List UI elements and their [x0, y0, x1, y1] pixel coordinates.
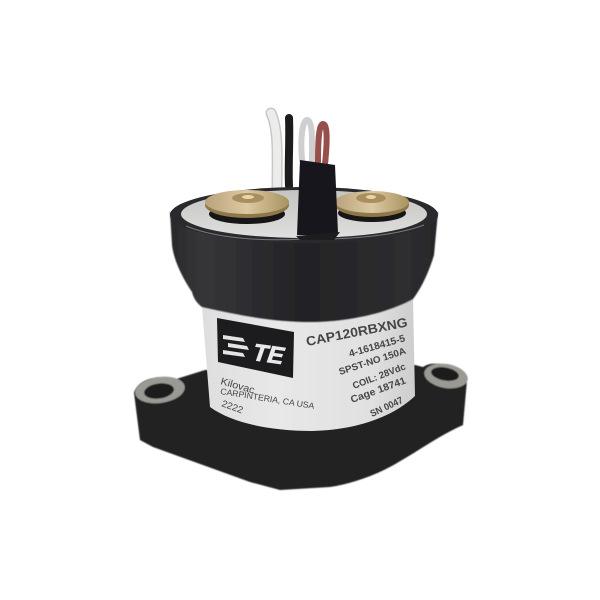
- insulating top surface: [181, 190, 427, 238]
- terminal: right brass post: [335, 191, 409, 222]
- label text: part numbers: COIL: 28Vdc: [351, 361, 407, 392]
- label text: part numbers: CARPINTERIA, CA USA: [220, 386, 315, 411]
- logo stripes: [223, 335, 249, 357]
- label text: part numbers: Kilovac: [219, 376, 256, 397]
- terminal: left brass post: [205, 190, 289, 224]
- label text: part numbers: Cage 18741: [349, 375, 408, 406]
- mounting flange: [133, 360, 470, 490]
- mounting hole: right: [422, 360, 470, 392]
- connector base: [296, 232, 340, 240]
- wire: black: [285, 118, 293, 186]
- product label: [202, 299, 415, 431]
- black cap: [170, 212, 438, 322]
- lead wires: [271, 113, 327, 190]
- rim lower edge highlight: [186, 225, 424, 240]
- label text: part numbers: 2222: [220, 398, 244, 416]
- label text: part numbers: 4-1618415-5: [348, 333, 407, 360]
- label text: part numbers: SPST-NO 150A: [338, 346, 408, 378]
- TE logo: TE: [251, 339, 287, 370]
- TE logo: [217, 318, 294, 378]
- wire: white loop: [301, 120, 312, 163]
- cap top rim: [170, 187, 438, 243]
- wire: red loop: [318, 124, 327, 164]
- black connector block: [297, 160, 338, 235]
- wire: white long: [271, 113, 277, 190]
- mounting hole: left: [133, 374, 187, 406]
- label text: part numbers: SN 0047: [369, 395, 405, 420]
- label text: part numbers: CAP120RBXNG: [305, 315, 409, 349]
- label text: part numbers: [219, 315, 409, 420]
